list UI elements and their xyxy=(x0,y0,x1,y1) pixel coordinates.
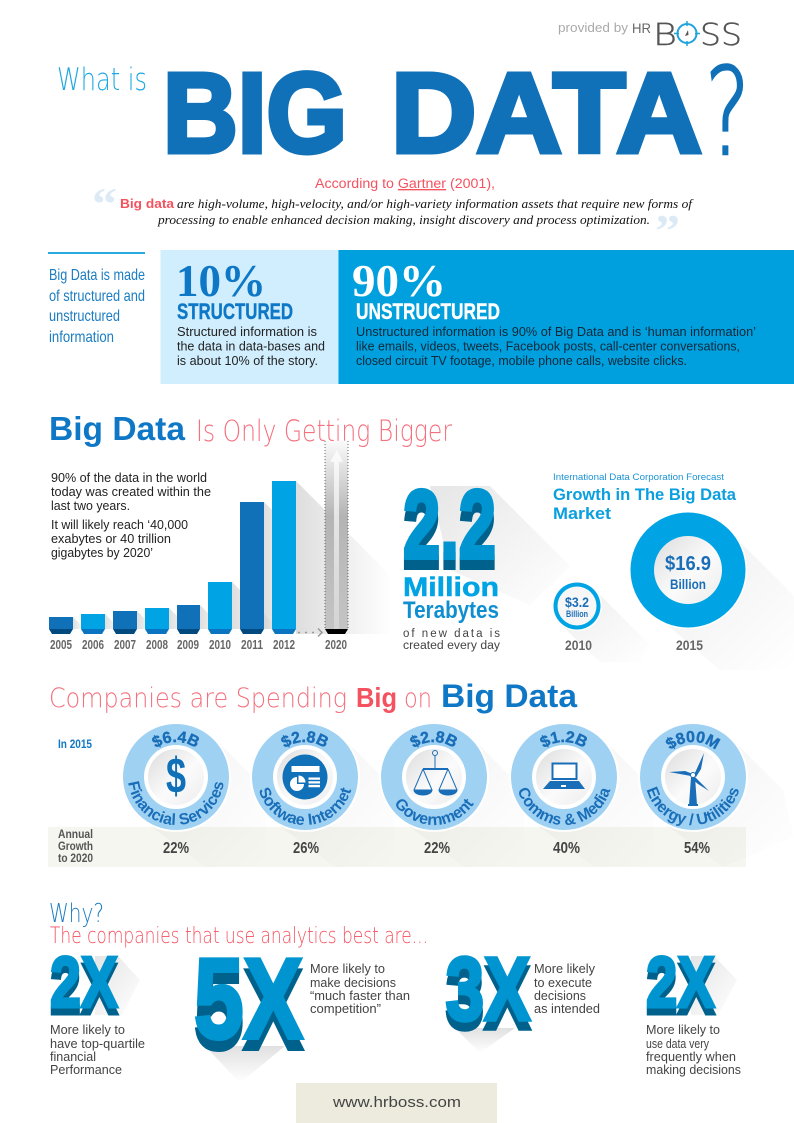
bar chart: data growth 2005 to 2020: 2010 xyxy=(209,638,231,652)
icon: dollar sign: $ xyxy=(166,748,186,804)
panel: annual growth band: Annual xyxy=(58,829,93,841)
stat: 2X use data frequently: 2X xyxy=(646,950,715,1030)
title: What is BIG DATA? xyxy=(57,44,750,183)
stat: 2X use data frequently: More likely to xyxy=(646,1022,720,1037)
panel: annual growth band: 26% xyxy=(293,840,319,857)
panel: 10% structured: Structured information is xyxy=(177,324,317,339)
intro: structured and unstructured note xyxy=(48,252,145,346)
intro: structured and unstructured note: of structured and xyxy=(49,288,145,305)
stat: 3X execute decisions: decisions xyxy=(534,988,586,1003)
quote: Gartner definition: “ xyxy=(92,178,117,229)
panel: 90% unstructured: like emails, videos, tweets, Facebook posts, call-center conversations, xyxy=(356,338,740,354)
panel: 10% structured: the data in data-bases and xyxy=(177,338,325,354)
panel: annual growth band: to 2020 xyxy=(58,853,93,865)
circle: financial services: Financial Services xyxy=(128,781,224,825)
circle: comms and media xyxy=(511,724,617,832)
circle: energy and utilities: $800M xyxy=(666,730,720,750)
panel: 90% unstructured xyxy=(338,250,794,384)
heading: Why?: Why? xyxy=(49,899,104,929)
quote: Gartner definition: are high-volume, high-velocity, and/or high-variety information assets that require new forms of xyxy=(177,196,694,211)
heading: Companies are Spending Big on Big Data: Big Data xyxy=(441,678,577,714)
chart: growth in the big data market: 2010 xyxy=(565,637,592,653)
panel: annual growth band: 54% xyxy=(684,840,710,857)
circle: financial services xyxy=(123,724,229,832)
text block: data growth facts: 90% of the data in the world xyxy=(51,471,207,485)
stat: 2.2 million terabytes: of new data is xyxy=(403,628,500,640)
bar chart: data growth 2005 to 2020: 2005 xyxy=(50,638,72,652)
logo: provided by HRBOSS: SS xyxy=(700,18,742,53)
stat: 2.2 million terabytes: Million xyxy=(403,572,499,602)
panel: annual growth band: 22% xyxy=(163,840,189,857)
circle: energy and utilities: Energy / Utilities xyxy=(646,786,739,826)
intro: structured and unstructured note: unstructured xyxy=(49,308,120,325)
heading: Companies are Spending Big on Big Data: Big xyxy=(356,682,397,713)
heading: Companies are Spending Big on Big Data: on xyxy=(404,683,432,714)
stat: 2X use data frequently: frequently when xyxy=(646,1049,736,1064)
intro: structured and unstructured note: Big Data is made xyxy=(49,267,145,284)
heading: Why?: The companies that use analytics best are... xyxy=(50,924,428,949)
chart: growth in the big data market: 2015 xyxy=(676,637,703,653)
title: What is BIG DATA?: BIG xyxy=(163,50,347,176)
logo: provided by HRBOSS xyxy=(558,18,742,53)
text block: data growth facts: today was created within the xyxy=(51,485,211,499)
bar chart: data growth 2005 to 2020 xyxy=(49,441,392,652)
stat: 3X execute decisions: More likely xyxy=(534,961,595,976)
panel: annual growth band xyxy=(48,827,746,867)
panel: 10% structured: is about 10% of the story. xyxy=(177,353,318,368)
chart: growth in the big data market xyxy=(552,472,794,670)
quote: Gartner definition: According to Gartner (2001), xyxy=(315,176,495,191)
logo: provided by HRBOSS: B xyxy=(653,18,677,53)
heading: Companies are Spending Big on Big Data: Companies are Spending xyxy=(49,683,347,714)
stat: 3X execute decisions: as intended xyxy=(534,1001,600,1016)
stat: 2X financial performance: 2X xyxy=(50,943,118,1023)
stat: 3X execute decisions: 3X xyxy=(446,940,530,1040)
stat: 2.2 million terabytes xyxy=(403,470,570,652)
chart: growth in the big data market: Market xyxy=(553,505,612,523)
stat: 3X execute decisions: 3X xyxy=(446,949,530,1049)
stat: 2.2 million terabytes: created every day xyxy=(403,640,500,652)
icon: scales xyxy=(414,750,457,795)
circle: comms and media: Comms & Media xyxy=(519,788,610,825)
stat: 3X execute decisions: to execute xyxy=(534,975,592,990)
footer: website: www.hrboss.com xyxy=(332,1094,461,1111)
text block: data growth facts: gigabytes by 2020’ xyxy=(51,546,153,560)
intro: structured and unstructured note: information xyxy=(49,329,114,346)
chart: growth in the big data market: Billion xyxy=(670,576,706,592)
panel: 10% structured: 10% xyxy=(176,255,266,306)
panel: annual growth band: 40% xyxy=(553,840,580,857)
quote: Gartner definition: processing to enable enhanced decision making, insight discovery and process optimization. xyxy=(157,212,650,227)
circle: government xyxy=(381,724,487,832)
bar chart: data growth 2005 to 2020: 2006 xyxy=(82,638,104,652)
heading: Big Data Is Only Getting Bigger: Is Only Getting Bigger xyxy=(196,414,452,448)
circle: financial services: $6.4B xyxy=(152,731,199,748)
logo: provided by HRBOSS: provided by xyxy=(558,20,629,35)
panel: 10% structured: STRUCTURED xyxy=(177,299,293,324)
chart: growth in the big data market: Billion xyxy=(566,609,588,620)
stat: 2X use data frequently: making decisions xyxy=(646,1062,741,1077)
stat: 5X faster decisions: 5X xyxy=(194,936,303,1063)
stat: 2X financial performance: financial xyxy=(50,1049,96,1064)
stat: 2.2 million terabytes: Terabytes xyxy=(403,597,499,624)
bar chart: data growth 2005 to 2020: 2007 xyxy=(114,638,136,652)
quote: Gartner definition: ” xyxy=(655,205,680,256)
heading: Big Data Is Only Getting Bigger: Big Data xyxy=(49,410,186,447)
icon: laptop xyxy=(543,764,585,789)
panel: 90% unstructured: closed circuit TV footage, mobile phone calls, website clicks. xyxy=(356,353,687,368)
stat: 2X financial performance xyxy=(50,943,145,1077)
panel: 90% unstructured: UNSTRUCTURED xyxy=(356,299,500,324)
stat: 3X execute decisions xyxy=(446,940,600,1053)
text block: data growth facts xyxy=(51,471,211,560)
heading: Why? xyxy=(49,899,428,949)
stat: 2X financial performance: 2X xyxy=(50,950,118,1030)
panel: 90% unstructured: 90% xyxy=(352,255,446,306)
circle: software internet xyxy=(252,724,358,832)
stat: 2X financial performance: have top-quartile xyxy=(50,1036,145,1051)
chart: growth in the big data market: Growth in The Big Data xyxy=(553,486,737,504)
chart: growth in the big data market: International Data Corporation Forecast xyxy=(553,472,724,483)
bar chart: data growth 2005 to 2020: 2008 xyxy=(146,638,168,652)
bar chart: data growth 2005 to 2020: 2011 xyxy=(241,638,263,652)
stat: 5X faster decisions xyxy=(194,936,410,1083)
bar chart: data growth 2005 to 2020: 2009 xyxy=(177,638,199,652)
stat: 5X faster decisions: 5X xyxy=(194,947,303,1074)
heading: Big Data Is Only Getting Bigger xyxy=(49,410,452,448)
stat: 5X faster decisions: competition” xyxy=(310,1001,381,1016)
stat: 5X faster decisions: More likely to xyxy=(310,961,385,976)
stat: 2X financial performance: Performance xyxy=(50,1062,122,1077)
quote: Gartner definition: Big data xyxy=(120,196,175,211)
panel: annual growth band: Growth xyxy=(58,841,93,853)
chart: growth in the big data market: $3.2 xyxy=(565,595,589,610)
icon: wind turbine xyxy=(669,753,709,806)
title: What is BIG DATA?: DATA xyxy=(391,50,702,176)
stat: 2X use data frequently: 2X xyxy=(646,943,715,1023)
stat: 2.2 million terabytes: 2.2 xyxy=(403,480,496,589)
stat: 5X faster decisions: “much faster than xyxy=(310,988,410,1003)
circle: government: Government xyxy=(396,798,474,826)
panel: 90% unstructured: Unstructured information is 90% of Big Data and is ‘human information’ xyxy=(356,324,756,339)
heading: Companies are Spending Big on Big Data xyxy=(49,678,577,714)
circle: software internet: $2.8B xyxy=(281,731,328,748)
title: What is BIG DATA?: ? xyxy=(705,44,750,183)
bar chart: data growth 2005 to 2020: 2020 xyxy=(325,638,347,652)
stat: 2X financial performance: More likely to xyxy=(50,1022,125,1037)
quote: Gartner definition xyxy=(92,176,694,256)
stat: 2.2 million terabytes: 2.2 xyxy=(403,470,496,579)
circle: software internet: Softwae Internet xyxy=(260,787,352,825)
footer: website xyxy=(296,1083,497,1123)
chart: growth in the big data market: $16.9 xyxy=(665,553,711,575)
circle: comms and media: $1.2B xyxy=(540,731,587,748)
text block: data growth facts: It will likely reach ‘40,000 xyxy=(51,518,188,532)
label: In 2015: In 2015 xyxy=(58,739,93,751)
stat: 2X use data frequently xyxy=(646,943,741,1077)
stat: 2X use data frequently: use data very xyxy=(646,1036,709,1051)
text block: data growth facts: exabytes or 40 trillion xyxy=(51,532,171,546)
title: What is BIG DATA?: What is xyxy=(57,62,147,98)
text block: data growth facts: last two years. xyxy=(51,499,130,513)
panel: annual growth band: 22% xyxy=(424,840,450,857)
logo: provided by HRBOSS: HR xyxy=(632,20,651,36)
bar chart: data growth 2005 to 2020: 2012 xyxy=(273,638,295,652)
icon: dashboard xyxy=(282,754,328,800)
circle: energy and utilities xyxy=(640,724,746,832)
panel: 10% structured xyxy=(160,250,338,384)
circle: government: $2.8B xyxy=(410,731,457,748)
stat: 5X faster decisions: make decisions xyxy=(310,975,396,990)
